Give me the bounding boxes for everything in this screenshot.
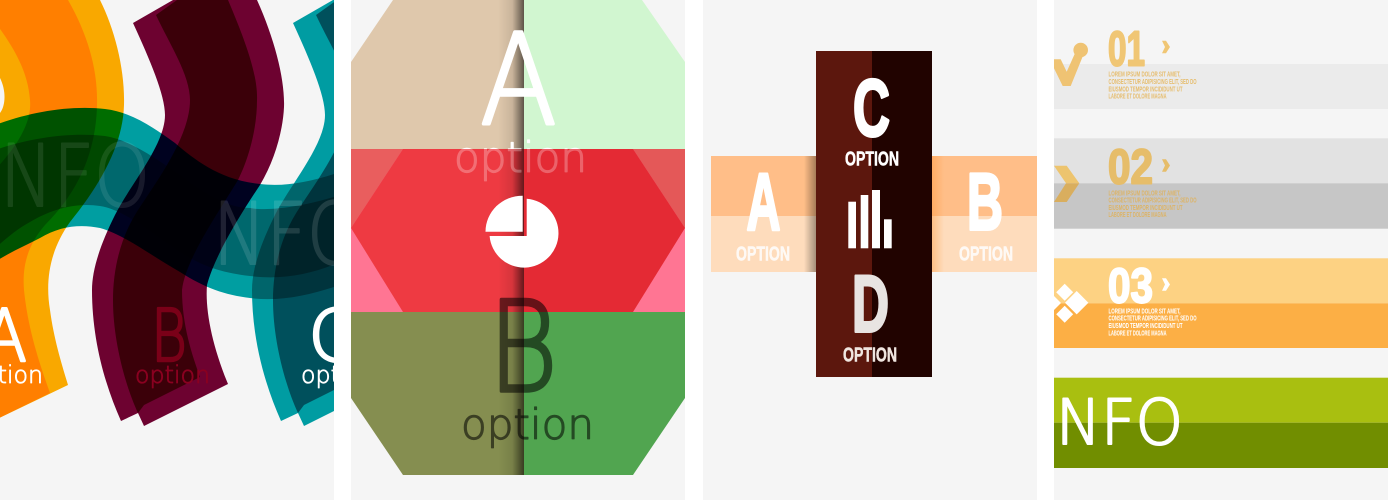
centre column: [816, 51, 932, 377]
number 02: 02: [1108, 140, 1153, 194]
label option B: option: [135, 361, 210, 389]
NFO title: NFO: [1056, 386, 1183, 459]
panel: wavy bands: [0, 0, 334, 500]
centre fold shadow: [498, 0, 524, 475]
row 01: [1054, 22, 1388, 109]
body text 03: CONSECTETUR ADIPISICING ELIT, SED DO: [1108, 316, 1197, 323]
chevron: [1162, 278, 1170, 291]
option D: OPTION: [843, 344, 897, 366]
icon: check: [1054, 43, 1088, 86]
number 01: 01: [1108, 22, 1145, 76]
maroon band B: [92, 0, 284, 426]
body text 03: EIUSMOD TEMPOR INCIDIDUNT UT: [1108, 323, 1183, 330]
option B: option: [461, 400, 594, 449]
right band: [932, 156, 1037, 272]
left band: [711, 156, 816, 272]
body text 01: [1108, 72, 1197, 100]
option A: option: [454, 133, 587, 182]
body text 02: [1108, 190, 1197, 219]
NFO watermark left: NFO: [0, 127, 150, 227]
label B: B: [151, 294, 187, 378]
icon: diamonds: [1054, 284, 1088, 323]
panel: octagon: [351, 0, 685, 500]
body text 01: EIUSMOD TEMPOR INCIDIDUNT UT: [1108, 86, 1183, 93]
octagon shape: [351, 0, 685, 475]
row INFO: [1054, 378, 1388, 468]
letter A: A: [480, 7, 557, 154]
body text 02: LABORE ET DOLORE MAGNA: [1108, 212, 1166, 219]
orange band A: [0, 0, 124, 420]
panel: cross: [703, 0, 1037, 500]
number 03: 03: [1108, 260, 1153, 314]
body text 01: LABORE ET DOLORE MAGNA: [1108, 93, 1166, 100]
NFO watermark right: NFO: [213, 185, 363, 285]
option B: OPTION: [959, 244, 1013, 266]
icon: bar chart: [848, 190, 892, 248]
red band: [351, 149, 685, 312]
body text 03: LABORE ET DOLORE MAGNA: [1108, 330, 1166, 337]
panel: numbered list: [1054, 0, 1388, 500]
row 03: [1054, 258, 1388, 348]
icon: arrow: [1054, 166, 1079, 202]
body text 02: EIUSMOD TEMPOR INCIDIDUNT UT: [1108, 205, 1183, 212]
body text 02: CONSECTETUR ADIPISICING ELIT, SED DO: [1108, 198, 1197, 205]
option C: OPTION: [845, 148, 899, 170]
letter A: A: [746, 158, 780, 248]
body text 03: LOREM IPSUM DOLOR SIT AMET,: [1108, 308, 1181, 315]
label option C: option: [301, 361, 376, 389]
option A: OPTION: [736, 244, 790, 266]
body text 01: CONSECTETUR ADIPISICING ELIT, SED DO: [1108, 79, 1197, 86]
icon: pie chart: [486, 196, 558, 268]
letter B: B: [488, 274, 558, 421]
letter D: D: [852, 260, 889, 350]
chevron: [1162, 159, 1170, 172]
horizontal teal wave: [0, 108, 340, 299]
teal band C: [252, 0, 334, 426]
label C: C: [308, 294, 360, 378]
body text 02: LOREM IPSUM DOLOR SIT AMET,: [1108, 190, 1181, 197]
letter C: C: [853, 64, 890, 154]
letter B: B: [967, 158, 1003, 248]
body text 01: LOREM IPSUM DOLOR SIT AMET,: [1108, 72, 1181, 79]
chevron: [1162, 41, 1170, 53]
row 02: [1054, 138, 1388, 229]
body text 03: [1108, 308, 1197, 337]
